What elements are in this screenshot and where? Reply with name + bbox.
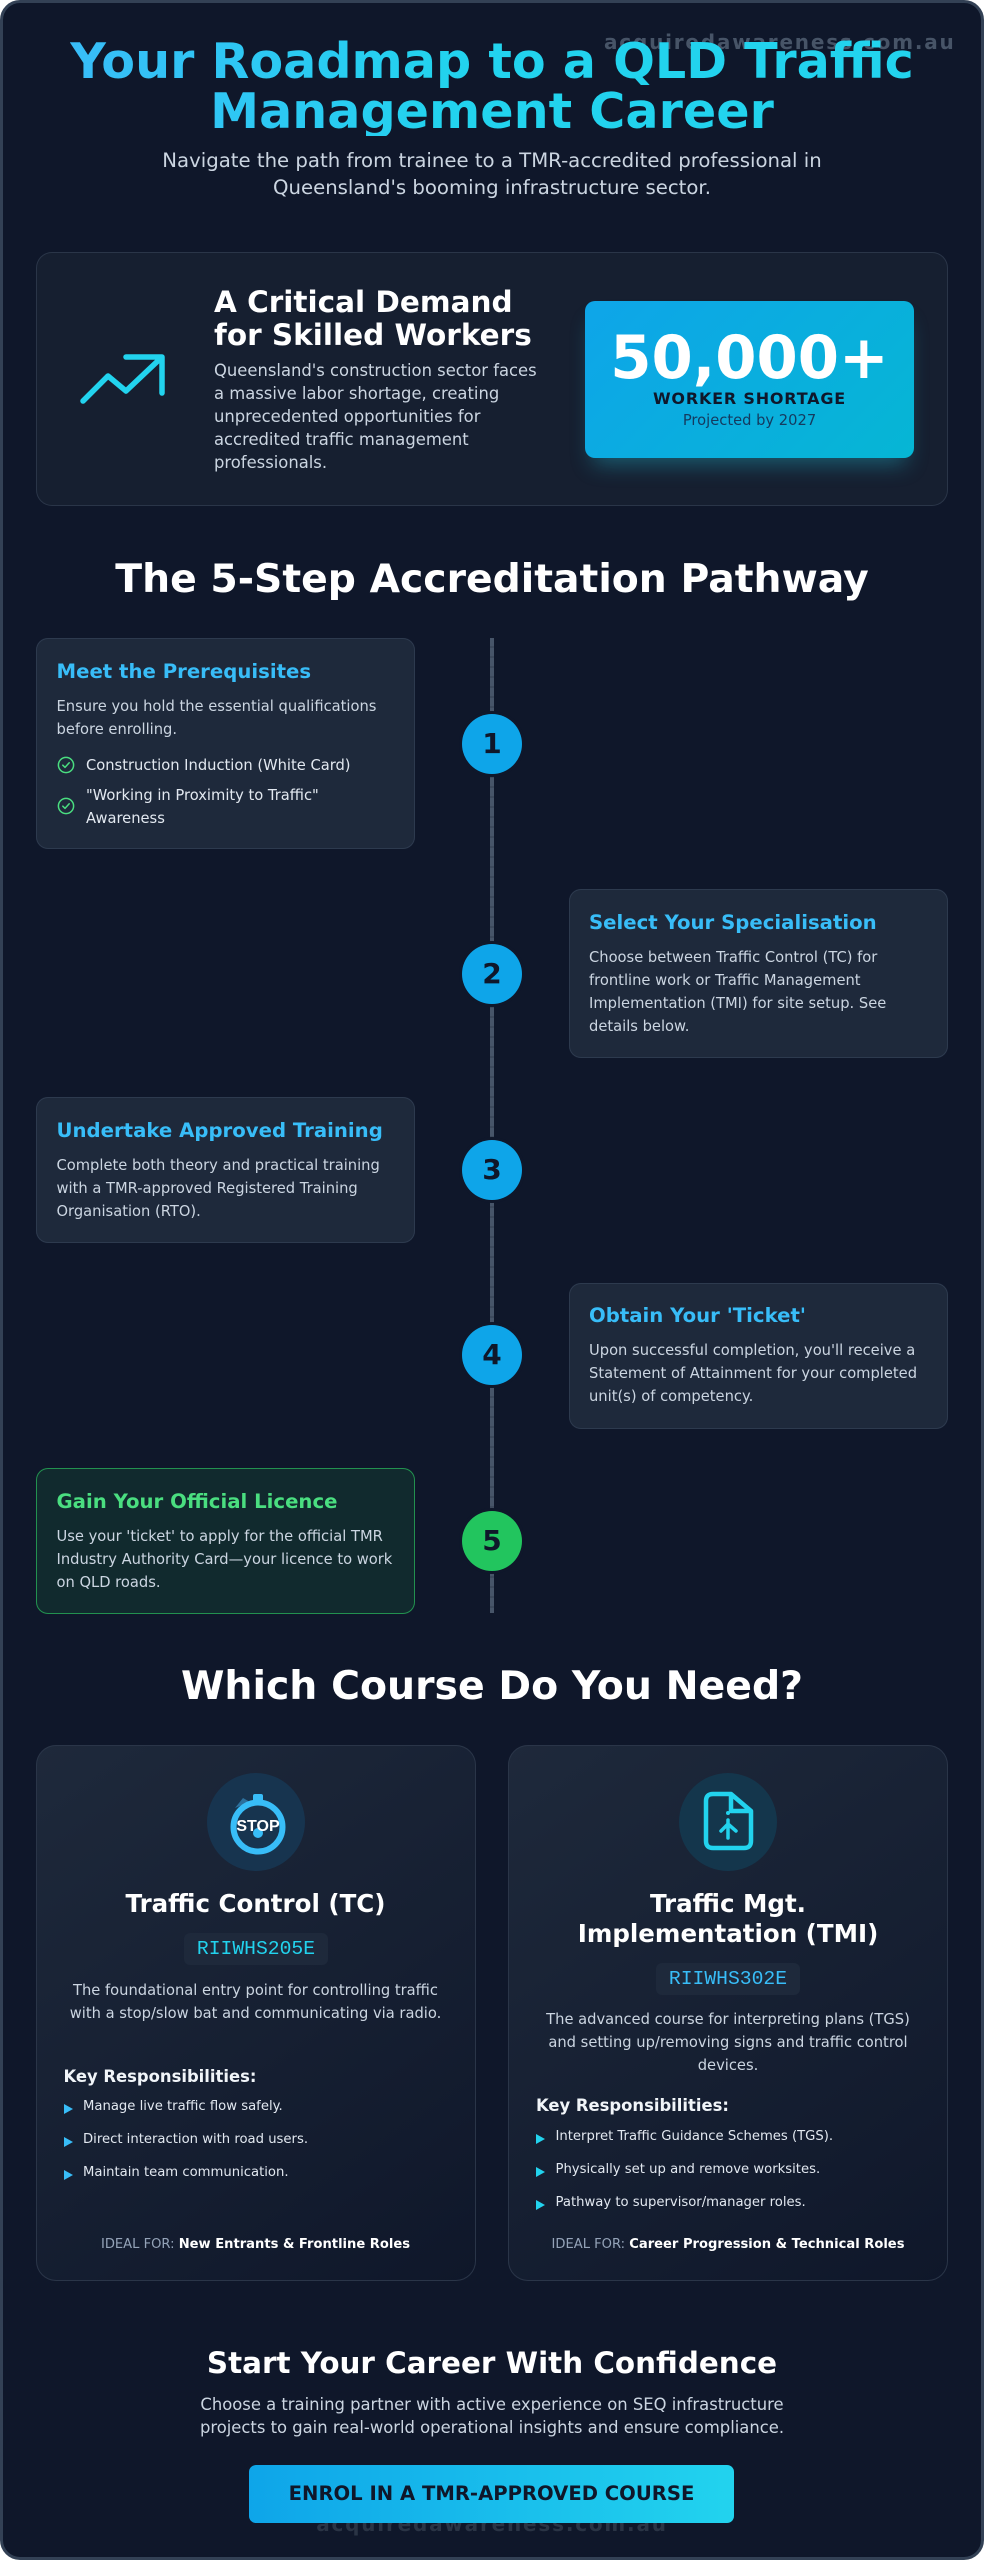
step 4 title: Obtain Your 'Ticket' bbox=[589, 1304, 806, 1327]
step 3 number bbox=[462, 1140, 522, 1200]
step 5 card bbox=[36, 1468, 415, 1614]
icon: trend arrow bbox=[80, 354, 165, 404]
bullet 1 bbox=[536, 2134, 545, 2144]
title bbox=[70, 32, 914, 140]
check item 2: "Working in Proximity to Traffic" bbox=[86, 786, 319, 804]
step 1 text: before enrolling. bbox=[56, 720, 177, 738]
step 1 text: Ensure you hold the essential qualifications bbox=[56, 698, 376, 714]
step 1 text bbox=[56, 698, 376, 738]
subtitle: Navigate the path from trainee to a TMR-accredited professional in bbox=[162, 149, 822, 172]
title: Management Career bbox=[210, 82, 774, 140]
subtitle: Queensland's booming infrastructure sector. bbox=[273, 176, 711, 199]
text: shortage description: accredited traffic management bbox=[214, 430, 469, 449]
bullet 1 bbox=[64, 2104, 72, 2114]
step 2 title: Select Your Specialisation bbox=[589, 910, 877, 934]
title: Your Roadmap to a QLD Traffic bbox=[70, 32, 914, 90]
course code: RIIWHS302E bbox=[669, 1968, 787, 1990]
step 5 text: Use your 'ticket' to apply for the official TMR bbox=[56, 1528, 383, 1544]
watermark: top right: acquiredawareness.com.au bbox=[604, 30, 956, 54]
text: shortage description: a massive labor shortage, creating bbox=[214, 384, 499, 403]
step 5 number bbox=[462, 1511, 522, 1571]
key responsibilities heading: Key Responsibilities: bbox=[64, 2066, 256, 2086]
course title: Implementation (TMI) bbox=[578, 1919, 878, 1948]
course description: with a stop/slow bat and communicating via radio. bbox=[70, 2004, 441, 2022]
step 3 card bbox=[36, 1097, 415, 1243]
item 2: Physically set up and remove worksites. bbox=[556, 2162, 820, 2176]
course code bbox=[656, 1962, 800, 1994]
step 4 number bbox=[462, 1325, 522, 1385]
item 1: Interpret Traffic Guidance Schemes (TGS). bbox=[556, 2128, 833, 2144]
check item 2: Awareness bbox=[86, 810, 165, 826]
heading: call to action: Start Your Career With Confidence bbox=[207, 2346, 777, 2380]
step 1 card bbox=[36, 638, 415, 849]
text: shortage description: professionals. bbox=[214, 453, 327, 472]
course description: The advanced course for interpreting plans (TGS) bbox=[546, 2011, 910, 2028]
course title bbox=[578, 1889, 878, 1948]
check item 1: Construction Induction (White Card) bbox=[86, 756, 351, 774]
course title: Traffic Control (TC) bbox=[126, 1889, 385, 1918]
icon: stop bat bbox=[207, 1773, 305, 1871]
step 4 text bbox=[589, 1342, 917, 1405]
step 5 text: on QLD roads. bbox=[56, 1574, 161, 1590]
step 2 text: Choose between Traffic Control (TC) for bbox=[589, 948, 877, 966]
step 3 title: Undertake Approved Training bbox=[56, 1118, 383, 1142]
step 3 number: 3 bbox=[482, 1153, 502, 1186]
step 2 text: frontline work or Traffic Management bbox=[589, 972, 861, 988]
button: enrol: ENROL IN A TMR-APPROVED COURSE bbox=[289, 2482, 694, 2505]
timeline line bbox=[490, 638, 494, 1613]
text: call to action: Choose a training partner with active experience on SEQ infrastructure bbox=[200, 2395, 784, 2414]
key responsibilities heading: Key Responsibilities: bbox=[536, 2096, 729, 2115]
text: shortage description: Queensland's construction sector faces bbox=[214, 361, 537, 380]
step 2 text: details below. bbox=[589, 1018, 689, 1034]
step 3 text: Complete both theory and practical training bbox=[56, 1156, 380, 1174]
step 4 text: Statement of Attainment for your completed bbox=[589, 1365, 917, 1382]
stat label: WORKER SHORTAGE bbox=[653, 388, 846, 408]
heading: critical demand bbox=[214, 285, 532, 352]
course description: devices. bbox=[698, 2057, 758, 2074]
bullet 2 bbox=[536, 2167, 545, 2177]
icon: document with arrow bbox=[679, 1773, 777, 1871]
check item 2 bbox=[86, 786, 319, 826]
heading: pathway: The 5-Step Accreditation Pathway bbox=[115, 557, 869, 602]
responsibility list bbox=[64, 2099, 308, 2180]
heading: critical demand: A Critical Demand bbox=[214, 285, 513, 319]
step 3 text: with a TMR-approved Registered Training bbox=[56, 1180, 358, 1196]
bullet 2 bbox=[64, 2137, 72, 2147]
step 5 text: Industry Authority Card—your licence to work bbox=[56, 1550, 392, 1568]
step 2 card bbox=[569, 889, 948, 1058]
check icon 1 bbox=[58, 756, 74, 774]
button: enrol bbox=[249, 2465, 734, 2523]
text: shortage description bbox=[214, 361, 537, 472]
check icon 2 bbox=[58, 798, 74, 814]
course code: RIIWHS205E bbox=[197, 1938, 315, 1960]
item 1: Manage live traffic flow safely. bbox=[83, 2099, 283, 2114]
stat box: worker shortage bbox=[585, 301, 914, 458]
step 5 text bbox=[56, 1528, 392, 1590]
step 2 text: Implementation (TMI) for site setup. See bbox=[589, 994, 886, 1012]
stat note: Projected by 2027 bbox=[683, 412, 816, 429]
bullet 3 bbox=[536, 2200, 545, 2210]
ideal for note: IDEAL FOR: New Entrants & Frontline Roles bbox=[101, 2236, 410, 2252]
course description: and setting up/removing signs and traffic control bbox=[548, 2034, 908, 2051]
responsibility list bbox=[536, 2128, 833, 2210]
step 5 number: 5 bbox=[482, 1524, 502, 1557]
text: call to action: projects to gain real-world operational insights and ensure compliance. bbox=[200, 2418, 784, 2437]
step 4 card bbox=[569, 1282, 948, 1428]
panel: traffic management implementation course bbox=[508, 1745, 948, 2281]
text: shortage description: unprecedented opportunities for bbox=[214, 407, 480, 426]
stat number: 50,000+ bbox=[610, 322, 889, 392]
ideal for note: IDEAL FOR: Career Progression & Technical Roles bbox=[552, 2236, 904, 2252]
course description bbox=[546, 2011, 910, 2074]
step 1 number bbox=[462, 714, 522, 774]
step 1 number: 1 bbox=[482, 727, 502, 760]
heading: critical demand: for Skilled Workers bbox=[214, 318, 532, 352]
step 4 number: 4 bbox=[482, 1338, 502, 1371]
bullet 3 bbox=[64, 2170, 72, 2180]
subtitle bbox=[162, 149, 822, 199]
step 3 text: Organisation (RTO). bbox=[56, 1202, 201, 1220]
step 5 title: Gain Your Official Licence bbox=[56, 1490, 337, 1512]
step 3 text bbox=[56, 1156, 380, 1220]
course description: The foundational entry point for controlling traffic bbox=[73, 1982, 438, 1998]
panel: traffic control course bbox=[36, 1745, 476, 2281]
item 2: Direct interaction with road users. bbox=[83, 2132, 308, 2147]
course title: Traffic Mgt. bbox=[650, 1889, 806, 1918]
step 4 text: Upon successful completion, you'll receive a bbox=[589, 1342, 915, 1359]
step 2 number bbox=[462, 944, 522, 1004]
heading: courses: Which Course Do You Need? bbox=[181, 1663, 803, 1709]
icon: stop bat: STOP bbox=[236, 1818, 280, 1835]
step 2 number: 2 bbox=[482, 957, 502, 990]
panel: critical demand bbox=[36, 252, 948, 506]
step 1 title: Meet the Prerequisites bbox=[56, 660, 311, 682]
text: call to action bbox=[200, 2395, 784, 2437]
item 3: Pathway to supervisor/manager roles. bbox=[556, 2194, 806, 2210]
step 2 text bbox=[589, 948, 886, 1034]
course description bbox=[70, 1982, 441, 2022]
item 3: Maintain team communication. bbox=[83, 2165, 289, 2180]
step 4 text: unit(s) of competency. bbox=[589, 1388, 753, 1405]
watermark: bottom: acquiredawareness.com.au bbox=[316, 2512, 668, 2536]
course code bbox=[184, 1933, 328, 1965]
